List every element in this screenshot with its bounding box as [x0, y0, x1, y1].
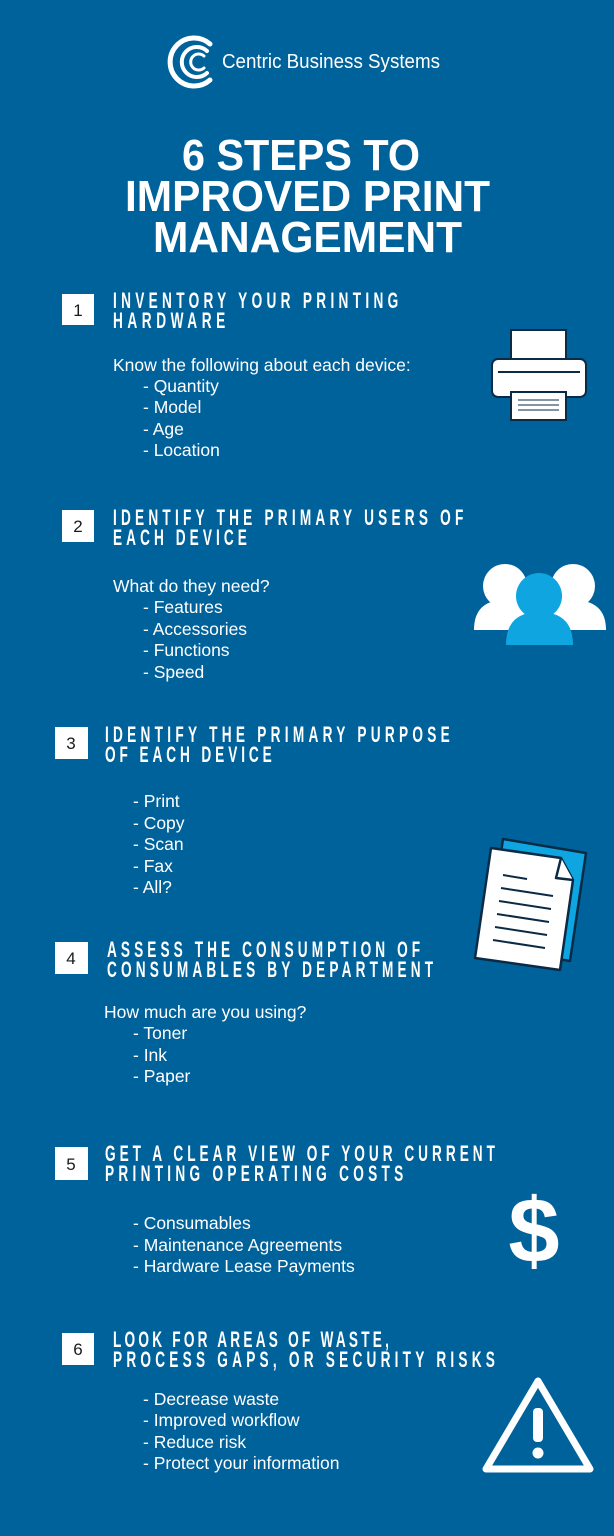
body 1: - Age	[143, 419, 184, 439]
body 2: - Functions	[143, 640, 230, 660]
title: 6 STEPS TO	[182, 131, 420, 180]
heading 4: CONSUMABLES BY DEPARTMENT	[107, 957, 433, 982]
heading 3	[105, 722, 450, 767]
body 6: - Reduce risk	[143, 1432, 246, 1452]
body 1: - Location	[143, 440, 220, 460]
body 4: - Paper	[133, 1066, 191, 1086]
body 1: Know the following about each device:	[113, 355, 411, 375]
number box 5	[55, 1147, 88, 1180]
title: IMPROVED PRINT	[125, 172, 490, 221]
heading 6: LOOK FOR AREAS OF WASTE,	[113, 1327, 389, 1352]
logo	[170, 38, 440, 86]
number box 1	[62, 294, 94, 325]
heading 5	[105, 1141, 495, 1186]
number box 6	[62, 1333, 94, 1365]
heading 2	[113, 505, 463, 550]
number box 4	[55, 942, 88, 974]
icon: printer	[492, 330, 586, 420]
body 1	[113, 355, 411, 460]
body 3: - Fax	[133, 856, 173, 876]
title: MANAGEMENT	[153, 213, 462, 262]
heading 3: OF EACH DEVICE	[105, 742, 272, 767]
number box 5: 5	[66, 1155, 76, 1174]
heading 6	[113, 1327, 495, 1372]
number box 1: 1	[73, 301, 83, 320]
icon: logo rings	[170, 38, 210, 86]
body 2: - Features	[143, 597, 223, 617]
body 4	[104, 1002, 307, 1086]
heading 5: PRINTING OPERATING COSTS	[105, 1161, 403, 1186]
body 2: - Accessories	[143, 619, 247, 639]
body 5: - Hardware Lease Payments	[133, 1256, 355, 1276]
body 3: - Copy	[133, 813, 185, 833]
body 6: - Improved workflow	[143, 1410, 300, 1430]
body 3	[133, 791, 185, 897]
body 6	[143, 1389, 339, 1473]
icon: warning	[486, 1381, 590, 1469]
heading 1: HARDWARE	[113, 308, 225, 333]
body 4: - Ink	[133, 1045, 167, 1065]
step 5	[55, 1141, 560, 1282]
heading 1	[113, 288, 398, 333]
body 4: How much are you using?	[104, 1002, 307, 1022]
body 3: - All?	[133, 877, 172, 897]
body 4: - Toner	[133, 1023, 187, 1043]
body 5	[133, 1213, 355, 1276]
body 6: - Decrease waste	[143, 1389, 279, 1409]
title	[125, 131, 490, 262]
number box 6: 6	[73, 1340, 83, 1359]
logo text: Centric Business Systems	[222, 51, 440, 73]
icon: users	[474, 564, 606, 645]
body 2	[113, 576, 270, 682]
number box 4: 4	[66, 949, 76, 968]
heading 1: INVENTORY YOUR PRINTING	[113, 288, 398, 313]
body 1: - Model	[143, 397, 201, 417]
heading 3: IDENTIFY THE PRIMARY PURPOSE	[105, 722, 450, 747]
body 5: - Maintenance Agreements	[133, 1235, 342, 1255]
body 2: What do they need?	[113, 576, 270, 596]
body 6: - Protect your information	[143, 1453, 339, 1473]
icon: dollar: $	[508, 1180, 560, 1282]
heading 4	[107, 937, 433, 982]
heading 5: GET A CLEAR VIEW OF YOUR CURRENT	[105, 1141, 495, 1166]
step 4	[55, 937, 433, 1086]
heading 2: IDENTIFY THE PRIMARY USERS OF	[113, 505, 463, 530]
body 3: - Print	[133, 791, 180, 811]
step 1	[62, 288, 586, 460]
body 2: - Speed	[143, 662, 204, 682]
number box 2: 2	[73, 517, 83, 536]
body 5: - Consumables	[133, 1213, 251, 1233]
step 6	[62, 1327, 590, 1473]
icon: documents	[475, 839, 586, 970]
step 3	[55, 722, 586, 970]
heading 4: ASSESS THE CONSUMPTION OF	[107, 937, 420, 962]
number box 3: 3	[66, 734, 76, 753]
heading 6: PROCESS GAPS, OR SECURITY RISKS	[113, 1347, 495, 1372]
body 3: - Scan	[133, 834, 184, 854]
body 1: - Quantity	[143, 376, 219, 396]
heading 2: EACH DEVICE	[113, 525, 247, 550]
number box 3	[55, 727, 88, 759]
number box 2	[62, 510, 94, 542]
step 2	[62, 505, 606, 682]
